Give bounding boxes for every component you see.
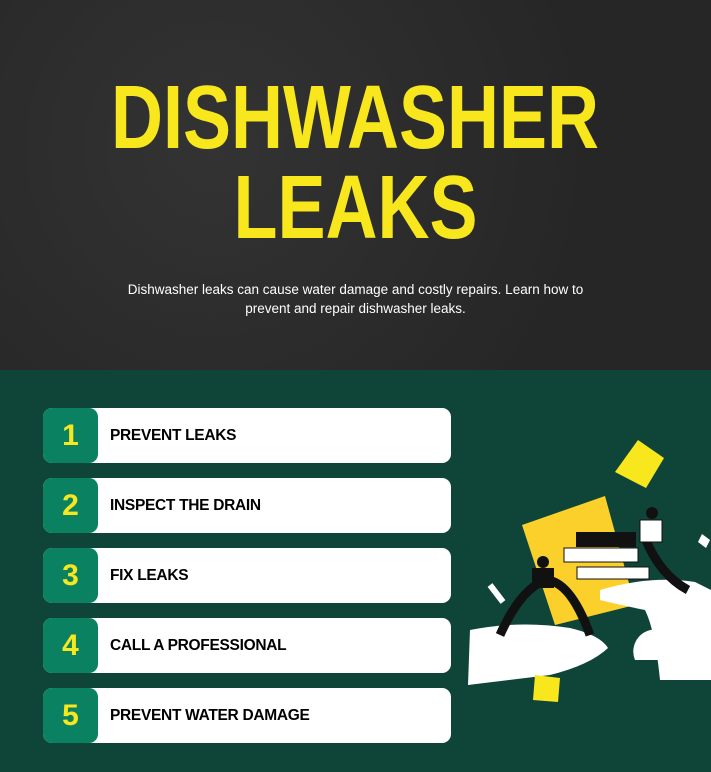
step 5: 5 [62, 699, 79, 732]
step 4: 4 [62, 629, 79, 662]
step 5 [43, 688, 451, 743]
step 3: FIX LEAKS [110, 567, 188, 584]
step 2 [43, 478, 451, 533]
step 5: PREVENT WATER DAMAGE [110, 707, 310, 724]
step 4 [43, 618, 451, 673]
step 4: CALL A PROFESSIONAL [110, 637, 286, 654]
step 1: PREVENT LEAKS [110, 427, 236, 444]
subtitle [128, 282, 583, 316]
step 2: 2 [62, 489, 79, 522]
subtitle: prevent and repair dishwasher leaks. [245, 301, 466, 316]
title line 2: LEAKS [233, 158, 478, 258]
step 1: 1 [62, 419, 79, 452]
step 2: INSPECT THE DRAIN [110, 497, 261, 514]
subtitle: Dishwasher leaks can cause water damage and costly repairs. Learn how to [128, 282, 583, 297]
illustration: hands passing books [468, 440, 711, 702]
title line 1: DISHWASHER [111, 68, 600, 168]
step 3 [43, 548, 451, 603]
header background [0, 0, 711, 370]
step 1 [43, 408, 451, 463]
step 3: 3 [62, 559, 79, 592]
